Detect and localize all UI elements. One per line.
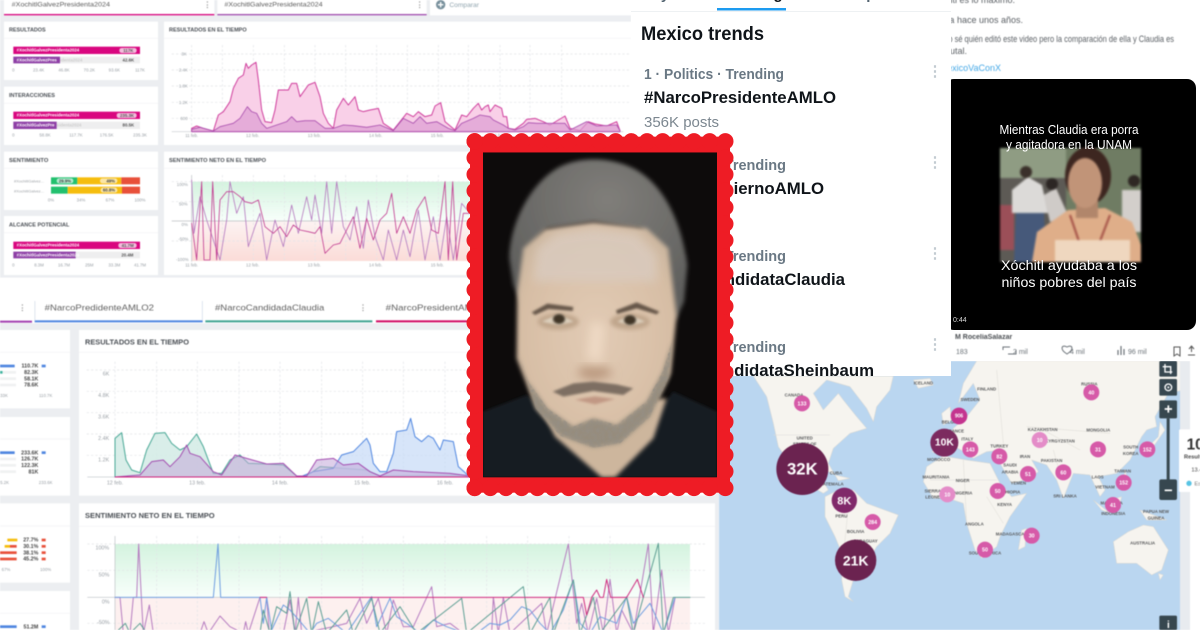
cluster markers: 284 [868,520,877,526]
line: blue series [115,544,675,630]
trend 2: ⋮ [928,154,942,171]
panel: top dashboard comparing Xochitl Galvez hashtags [0,0,631,278]
trend 4: ⋮ [928,336,942,353]
mouth [575,396,615,404]
tabs: bottom hashtag tabs: #NarcoPredidenteAMLO2 [45,303,154,313]
trend 4 [639,336,942,380]
post: video credit and engagement row: 4 mil [1070,349,1085,356]
card: sentimiento bars, cropped: 45.2% [23,557,39,563]
map: ocean and land: PERU [835,514,847,519]
map: ocean and land: TURKEY [990,443,1008,448]
map: ocean and land: KAZAKHSTAN [1028,427,1058,432]
trend 3: ⋮ [928,245,942,262]
cluster markers: 10 [1037,438,1043,444]
chart: resultados en el tiempo, area chart: 1.8K [179,84,188,89]
heading: Mexico trends [641,24,764,45]
map: ocean and land: ITALY [961,436,973,441]
tabs: bottom hashtag tabs [0,301,719,323]
cluster markers: 82 [996,454,1002,460]
trend 3 [639,245,942,289]
card: resultados bars: 46.8K [58,68,70,73]
chart: resultados en el tiempo, four series: 14 feb. [272,480,288,486]
tabs: top hashtag tabs: ⋮ [416,0,424,9]
map: ocean and land: TAIWAN [1114,469,1131,474]
chart: sentimiento neto en el tiempo, line chart: 14 feb. [369,263,382,268]
card: resultados bars, cropped: 78.6K [24,383,38,389]
card: resultados bars: 23.4K [33,68,44,73]
frame: red scalloped border [470,137,730,493]
card: sentimiento bars, cropped [0,503,70,583]
post: video credit and engagement row: 96 mil [1128,349,1147,356]
card: sentimiento bars, cropped: 38.1% [23,550,39,556]
marker: 32K [776,443,828,495]
chart: resultados en el tiempo, area chart: 3K [181,52,187,57]
card: resultados bars, cropped: 110.7K [21,364,38,370]
map: ocean and land: MAURITANIA [922,474,950,479]
chart: resultados en el tiempo, area chart [164,22,631,145]
map: world map of results [718,361,1200,630]
tabs: top hashtag tabs: ⋮ [203,0,211,9]
panel: Mexico trends [631,0,951,380]
cluster markers: 60 [1060,470,1066,476]
card: sentimiento stacked bars: SENTIMIENTO [9,158,48,164]
map: ocean and land: LEONE [925,495,940,500]
video: comparison clip [945,79,1196,330]
cluster markers: 21K [843,552,869,568]
card: resultados bars: identa2024 [60,57,83,62]
card: alcance potencial bars [4,216,158,275]
chart: resultados en el tiempo, four series: RESULTADOS EN EL TIEMPO [85,339,190,346]
video: comparison clip: Mientras Claudia era porra [1000,122,1139,137]
chart: resultados en el tiempo, four series: 3.6K [98,414,110,420]
post: video credit and engagement row: 183 [956,349,968,356]
card: interacciones bars, cropped [0,417,70,496]
card: sentimiento stacked bars: 29.9% [59,178,71,183]
map: ocean and land: BOLIVIA [847,529,865,534]
card: interacciones bars: 235.3K [133,133,147,138]
card: sentimiento bars, cropped: 27.7% [23,538,39,544]
card: resultados bars: 70.2K [84,68,95,73]
map: ocean and land: PARAGUAY [854,539,878,544]
chart: sentimiento neto en el tiempo, four series: 100% [96,546,109,552]
cluster markers: 906 [955,414,963,420]
post: tweet text [930,0,1174,73]
chart: resultados en el tiempo, area chart: 1.2K [179,100,188,105]
card: resultados bars: #XochitlGalvezPresidenta2024 [17,48,80,53]
chart: resultados en el tiempo, four series: 12 feb. [107,480,123,486]
chart: resultados en el tiempo, four series: 1.2K [98,457,110,463]
moustache [553,382,633,397]
area: purple series [115,445,470,477]
map: ocean and land: SWEDEN [960,397,980,402]
face [517,222,677,448]
card: sentimiento bars, cropped: 67% [2,567,10,572]
card: resultados bars: 93.6K [109,68,120,73]
map: ocean and land: IRAN [1020,454,1030,459]
map: ocean and land: CANADA [785,393,804,398]
map: ocean and land: SIERRA [924,488,942,493]
shirt [483,392,717,477]
cluster markers: 133 [798,401,806,407]
map: ocean and land: MADAGASCAR [996,532,1028,537]
map: ocean and land: ETHIOPIA [1000,489,1021,494]
card: resultados bars: RESULTADOS [9,28,46,34]
card: alcance potencial bars: 20.4M [121,253,134,258]
map: ocean and land: NIGER [956,478,970,483]
tabs: bottom hashtag tabs: ⋮ [18,304,26,313]
map: ocean and land: ANGOLA [965,521,985,526]
card: interacciones bars [4,87,158,145]
card: resultados bars: #XochitlGalvezPres [17,57,57,62]
chart: sentimiento neto en el tiempo, line chart: 13 feb. [308,263,321,268]
card: alcance potencial bars: 33.3M [108,263,121,268]
card: sentimiento stacked bars: 67% [106,198,114,203]
card: sentimiento stacked bars: 100% [134,198,146,203]
cluster markers: 152 [1119,481,1128,487]
map: ocean and land: MOROCCO [927,457,951,462]
cluster markers [776,384,1155,581]
card: interacciones bars: #XochitlGalvezPre [17,123,55,128]
map: ocean and land: CUBA [830,470,843,475]
chart: resultados en el tiempo, area chart: 14 feb. [369,133,382,138]
trend 3: 3 · Politics · Trending [639,249,786,265]
post: tweet text: brutal. [942,46,967,56]
card: interacciones bars: INTERACCIONES [9,93,56,99]
trend 1 [644,63,942,131]
video still: woman speaking in a crowd [1000,147,1141,262]
line: purple series [115,544,675,630]
trend 2 [639,154,942,198]
card: interacciones bars: sidenta2024 [57,123,82,128]
trend 2: #NarcoGobiernoAMLO [643,179,824,198]
chart: sentimiento neto en el tiempo, line chart: 50% [179,202,188,207]
map: ocean and land: GUINEA [1148,516,1165,521]
card: sentimiento stacked bars: 60.8% [103,188,115,193]
chart: sentimiento neto en el tiempo, line chart [164,152,631,275]
map: ocean and land: YEMEN [1011,480,1026,485]
map: ocean and land: AUSTRALIA [1130,541,1156,546]
map controls [1159,361,1177,630]
video: comparison clip: niños pobres del país [1002,274,1136,290]
card: interacciones bars: 80.5K [123,123,135,128]
area: purple series [192,107,620,132]
cluster markers: 50 [995,489,1001,495]
map: ocean and land: MALAYSIA [1101,500,1124,505]
beard [528,346,671,450]
trend 2: 2 · Politics · Trending [639,158,786,174]
map: ocean and land: KOREA [1123,451,1139,456]
chart: resultados en el tiempo, area chart: 15 feb. [431,133,444,138]
trend 1: 1 · Politics · Trending [644,67,784,83]
card: sentimiento stacked bars: #XochitlGalvez... [14,188,44,193]
chart: resultados en el tiempo, area chart: 16 feb. [492,133,505,138]
map: ocean and land: ICELAND [914,381,933,386]
cluster markers: 41 [1110,503,1116,509]
chart: sentimiento neto en el tiempo, line chart: -100% [176,257,189,262]
chart: sentimiento neto en el tiempo, line chart: 11 feb. [185,263,198,268]
map: ocean and land: ARABIA [1002,469,1019,474]
panel: X trends and post screenshots [631,0,1196,376]
card: sentimiento stacked bars: 0% [48,198,54,203]
cluster markers: 10 [944,492,950,498]
chart: sentimiento neto en el tiempo, four series [79,503,715,630]
trend 1: ⋮ [928,63,942,80]
card: interacciones bars: 235.3K [120,113,135,118]
chart: sentimiento neto en el tiempo, four series: 50% [99,573,110,579]
chart: sentimiento neto en el tiempo, four series: -50% [97,620,110,626]
cluster markers: 31 [1095,447,1101,453]
cluster markers: 143 [966,447,975,453]
forehead highlight [533,228,657,282]
area: blue series [115,418,470,477]
eyebrows [532,304,573,315]
post: tweet text: sánia hace unos años. [933,15,1023,25]
chart: sentimiento neto en el tiempo, line chart: SENTIMIENTO NETO EN EL TIEMPO [169,158,266,164]
chart: resultados en el tiempo, area chart: 12 feb. [246,133,259,138]
card: resultados bars, cropped: 82.3K [24,370,38,376]
card: interacciones bars: #XochitlGalvezPresidenta2024 [17,113,80,118]
cluster markers: 152 [1143,447,1152,453]
post: video credit and engagement row [955,334,1195,356]
card: alcance potencial bars: #XochitlGalvezPresidenta2024 [17,252,80,257]
card: alcance potencial bars: ALCANCE POTENCIAL [9,223,69,229]
card: interacciones bars: 0 [12,133,15,138]
card: sentimiento stacked bars [4,152,158,210]
chart: resultados en el tiempo, area chart: RESULTADOS EN EL TIEMPO [169,28,247,34]
post: tweet text: #MexicoVaConX [935,63,1001,73]
cluster markers: 10K [935,438,954,449]
chart: resultados en el tiempo, area chart: 600 [180,116,188,121]
card: resultados bars: 117K [123,48,134,53]
line: crimson baseline series [260,579,643,615]
post: video credit and engagement row: 2 mil [1013,349,1028,356]
card: alcance potencial bars: 41.7M [134,263,146,268]
card: alcance potencial bars: 8.3M [34,263,44,268]
map: ocean and land: PAPUA NEW [1143,509,1170,514]
chart: sentimiento neto en el tiempo, line chart: 12 feb. [246,263,259,268]
card: resultados bars: 0 [12,68,15,73]
card: resultados bars, cropped [0,330,70,408]
result tooltip card [1179,429,1200,492]
card: alcance potencial bars: 25M [85,263,94,268]
card: sentimiento stacked bars: 34% [77,198,85,203]
trend 3: #NarcoCandidataClaudia [646,270,846,289]
cluster markers: 30 [1029,534,1035,540]
post: video credit and engagement row: M RocelíaSalazar [955,334,1012,341]
line: teal series [115,543,690,630]
chart: sentimiento neto en el tiempo, line chart: 0% [182,222,188,227]
map: ocean and land: FINLAND [977,386,996,391]
map: ocean and land: SRI LANKA [1053,494,1078,499]
card: alcance potencial bars: 16.7M [58,263,70,268]
card: alcance potencial bars: 41.7M [122,243,134,248]
tabs: bottom hashtag tabs: #NarcoCandidadaClaudia [215,303,325,313]
chart: sentimiento neto en el tiempo, line chart: -50% [178,237,189,242]
map: ocean and land: RUSSIA [1081,381,1098,386]
eyes [542,314,574,325]
card: sentimiento bars, cropped: 30.1% [23,544,39,550]
card: sentimiento bars, cropped: 100% [40,567,51,572]
video: comparison clip: Xóchitl ayudaba a los [1001,257,1137,273]
map: ocean and land: VIETNAM [1095,485,1115,490]
map: ocean and land: KYRGYZSTAN [1045,438,1075,443]
card: interacciones bars: 117.7K [69,133,83,138]
cluster markers: 51 [1025,472,1031,478]
chart: sentimiento neto en el tiempo, four series: SENTIMIENTO NETO EN EL TIEMPO [85,513,215,520]
card: sentimiento stacked bars: #XochitlGalvez... [14,179,44,184]
chart: resultados en el tiempo, area chart: 2.4K [179,68,188,73]
card: resultados bars, cropped: 110.7K [39,393,52,398]
chart: resultados en el tiempo, four series: 6K [103,372,110,378]
cluster markers: 50 [982,548,988,554]
map: ocean and land: UNITED [797,435,813,440]
card: alcance potencial bars: 0 [12,263,15,268]
chart: resultados en el tiempo, four series: 4.8K [98,393,110,399]
map: ocean and land: FRANCE [946,428,964,433]
panel: bottom dashboard comparing narco hashtags [0,301,719,630]
map: ocean and land: SAUDI [1003,462,1017,467]
chart: resultados en el tiempo, four series: 13 feb. [189,480,205,486]
hair [509,159,687,322]
eye sockets [538,314,579,330]
map: ocean and land: STATES OF [793,441,817,446]
card: resultados bars, cropped: 33K [0,393,8,398]
map: ocean and land: MONGOLIA [1086,428,1111,433]
card: alcance bars, cropped [0,591,70,630]
neck [542,398,667,477]
map: ocean and land: SOUTH [1123,445,1138,450]
chart: resultados en el tiempo, four series: 16 feb. [437,480,453,486]
card: interacciones bars: 58.8K [39,133,51,138]
tabs: top hashtag tabs: #XochitlGalvezPresidenta2024 [224,2,323,9]
area: teal series [115,433,470,477]
trend 4: 4 · Politics · Trending [639,340,786,356]
line: purple series [192,180,470,260]
cluster markers: 8K [837,495,851,507]
card: resultados bars: 117K [135,68,145,73]
chart: resultados en el tiempo, area chart: 13 feb. [308,133,321,138]
chart: resultados en el tiempo, four series: 15 feb. [354,480,370,486]
map: ocean and land: KENYA [997,502,1013,507]
map: ocean and land: INDONESIA [1101,511,1126,516]
map: ocean and land: PAKISTAN [1041,458,1062,463]
tabs: top hashtag tabs: Comparar [449,2,480,9]
chart: sentimiento neto en el tiempo, line chart: 15 feb. [431,263,444,268]
card: resultados bars: 42.6K [123,58,135,63]
trend 1: 356K posts [644,114,719,131]
portrait: man with grey hair and beard [483,152,717,477]
chart: sentimiento neto en el tiempo, four series: 0% [102,600,110,606]
card: interacciones bars, cropped: 126.7K [21,457,38,463]
map: ocean and land: GUATEMALA [816,482,845,487]
chart: resultados en el tiempo, four series: 2.4K [98,436,110,442]
map: ocean and land: NIGERIA [954,490,973,495]
chart: sentimiento neto en el tiempo, line chart: 100% [177,182,188,187]
chart: resultados en el tiempo, four series [79,330,715,496]
card: interacciones bars, cropped: 233.6K [21,450,38,456]
tabs: top hashtag tabs [0,0,631,15]
tabs: bottom hashtag tabs: #NarcoPresidentAMLO [386,303,486,313]
map: ocean and land: LAOS [1092,475,1104,480]
tabs: bottom hashtag tabs: ⋮ [359,304,367,313]
card: resultados bars, cropped: 58.1K [24,376,38,382]
video: comparison clip: y agitadora en la UNAM [1006,137,1132,152]
card: interacciones bars: 176.5K [100,133,114,138]
card: interacciones bars, cropped: 233.6K [39,480,53,485]
tabs: top hashtag tabs: #XochitlGalvezPresidenta2024 [12,2,110,9]
card: sentimiento stacked bars: 49% [106,178,115,183]
map: ocean and land [719,361,1183,630]
card: alcance potencial bars: #XochitlGalvezPresidenta2024 [17,243,80,248]
video: comparison clip: 0:44 [953,317,967,324]
map: ocean and land: SOUTH AFRICA [969,550,1002,555]
map: ocean and land: BELGIUM [942,420,962,425]
trend 1: #NarcoPresidenteAMLO [644,88,836,107]
cluster markers: 40 [1088,390,1094,396]
photo: portrait in a red scalloped frame [466,133,734,496]
chart: resultados en el tiempo, area chart: 11 feb. [185,133,198,138]
marker: 32K: 32K [787,460,818,479]
nose [577,367,613,381]
card: interacciones bars, cropped: 81K [29,469,38,475]
line: pink series [192,182,470,260]
area: pink series [192,62,620,132]
tab bar cropped at the top [631,0,951,12]
card: interacciones bars, cropped: 122.3K [21,463,38,469]
card: resultados bars [4,22,158,80]
